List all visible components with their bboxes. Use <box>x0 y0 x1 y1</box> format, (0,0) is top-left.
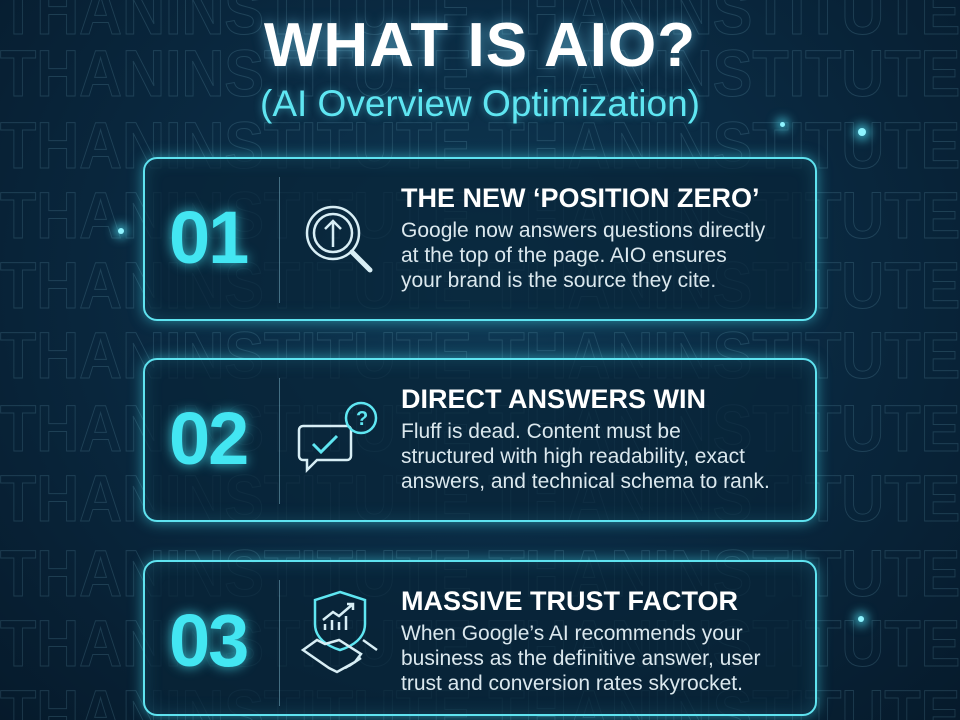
text block <box>401 183 766 292</box>
text block: business as the definitive answer, user <box>401 647 761 670</box>
panel: 03 <box>143 560 817 716</box>
number 01: 01 <box>169 196 247 279</box>
icon: chat bubbles: ? <box>356 408 368 430</box>
text block: DIRECT ANSWERS WIN <box>401 384 706 414</box>
icon: magnifier with arrow <box>306 206 372 272</box>
text block: Google now answers questions directly <box>401 219 765 242</box>
panel: 02 <box>143 358 817 522</box>
text block: your brand is the source they cite. <box>401 269 716 292</box>
icon: shield handshake <box>301 590 378 674</box>
text block <box>401 586 761 695</box>
text block: structured with high readability, exact <box>401 445 745 468</box>
panel: 01 <box>143 157 817 321</box>
text block <box>401 384 770 493</box>
subtitle: (AI Overview Optimization) <box>260 83 700 124</box>
number 02: 02 <box>169 397 247 480</box>
text block: When Google’s AI recommends your <box>401 622 743 645</box>
text block: answers, and technical schema to rank. <box>401 470 770 493</box>
number 03: 03 <box>169 599 247 682</box>
title: WHAT IS AIO? <box>264 11 696 80</box>
text block: MASSIVE TRUST FACTOR <box>401 586 738 616</box>
icon: chat bubbles <box>298 402 378 473</box>
text block: Fluff is dead. Content must be <box>401 420 681 443</box>
text block: at the top of the page. AIO ensures <box>401 244 727 267</box>
text block: trust and conversion rates skyrocket. <box>401 672 743 695</box>
text block: THE NEW ‘POSITION ZERO’ <box>401 183 760 213</box>
